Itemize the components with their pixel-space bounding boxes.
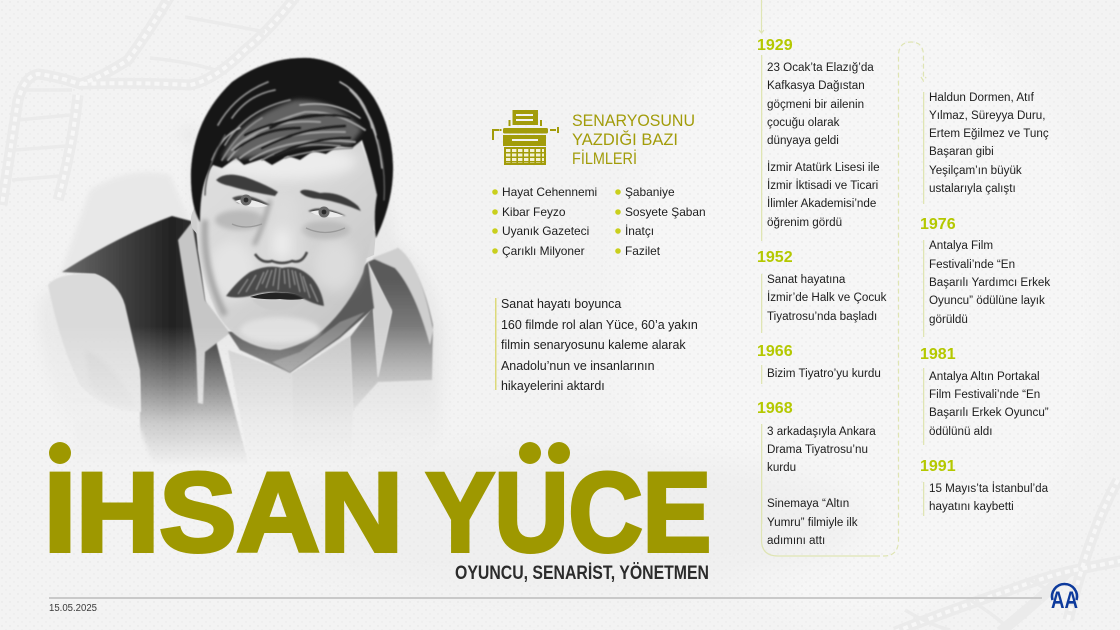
timeline 1952: İzmir’de Halk ve Çocuk (767, 291, 887, 304)
timeline 1976 (920, 216, 1050, 337)
hair (191, 58, 393, 238)
timeline 1968: 3 arkadaşıyla Ankara (767, 425, 876, 438)
timeline 1968: Drama Tiyatrosu’nu (767, 443, 868, 456)
timeline 1976: Başarılı Yardımcı Erkek (929, 276, 1050, 289)
timeline 1929 (757, 37, 880, 241)
timeline 1929: öğrenim gördü (767, 216, 842, 229)
timeline masters: Ertem Eğilmez ve Tunç (929, 127, 1049, 140)
timeline 1968: Sinemaya “Altın (767, 497, 849, 510)
film list: Sosyete Şaban (625, 205, 706, 219)
career paragraph: Anadolu’nun ve insanlarının (501, 359, 655, 373)
nose (293, 228, 304, 254)
timeline 1981: 1981 (920, 346, 956, 363)
timeline 1981: ödülünü aldı (929, 425, 992, 438)
timeline 1976: 1976 (920, 216, 956, 233)
timeline 1929: çocuğu olarak (767, 116, 840, 129)
timeline 1929: İlimler Akademisi’nde (767, 197, 876, 210)
icon: AA logo: AA (1051, 587, 1078, 614)
career paragraph (495, 297, 698, 393)
mouth (250, 292, 305, 300)
timeline 1966: Bizim Tiyatro’yu kurdu (767, 367, 881, 380)
film list: Kibar Feyzo (502, 205, 566, 219)
timeline 1968 (757, 400, 876, 547)
career paragraph: 160 filmde rol alan Yüce, 60’a yakın (501, 318, 698, 332)
ears (191, 205, 376, 260)
timeline masters: Başaran gibi (929, 145, 994, 158)
date: 15.05.2025 (49, 603, 97, 614)
film list: Şabaniye (625, 185, 675, 199)
timeline 1968: adımını attı (767, 534, 825, 547)
film list: Hayat Cehennemi (502, 185, 597, 199)
name title: YÜCE (426, 450, 711, 575)
timeline masters (923, 91, 1049, 204)
left sleeve (48, 272, 147, 456)
timeline 1991: 15 Mayıs’ta İstanbul’da (929, 482, 1049, 495)
shirt front (228, 268, 393, 421)
face (196, 140, 378, 350)
timeline 1976: Antalya Film (929, 239, 993, 252)
timeline connector (759, 0, 926, 556)
right shoulder (350, 248, 433, 410)
watercolor wash (44, 174, 440, 412)
film list: Çarıklı Milyoner (502, 244, 585, 258)
timeline 1929: 23 Ocak’ta Elazığ’da (767, 61, 874, 74)
timeline 1991: hayatını kaybetti (929, 500, 1014, 513)
timeline 1976: görüldü (929, 313, 968, 326)
vest (62, 216, 250, 470)
career paragraph: Sanat hayatı boyunca (501, 297, 621, 311)
neck (228, 262, 374, 373)
film list: Fazilet (625, 244, 661, 258)
film list (492, 185, 706, 258)
subtitle: OYUNCU, SENARİST, YÖNETMEN (455, 563, 709, 584)
timeline 1929: İzmir İktisadi ve Ticari (767, 179, 878, 192)
timeline 1929: Kafkasya Dağıstan (767, 79, 865, 92)
timeline 1981 (920, 346, 1049, 445)
timeline 1991: 1991 (920, 458, 956, 475)
timeline 1929: 1929 (757, 37, 793, 54)
timeline 1991 (920, 458, 1049, 516)
eyes (232, 196, 270, 205)
timeline 1929: göçmeni bir ailenin (767, 98, 864, 111)
heading: scripts (572, 112, 695, 168)
timeline 1929: İzmir Atatürk Lisesi ile (767, 161, 880, 174)
timeline 1952: Sanat hayatına (767, 273, 846, 286)
timeline 1968: Yumru” filmiyle ilk (767, 516, 858, 529)
icon: typewriter (492, 110, 559, 165)
timeline masters: Haldun Dormen, Atıf (929, 91, 1035, 104)
footer rule (49, 597, 1042, 599)
career paragraph: filmin senaryosunu kaleme alarak (501, 338, 686, 352)
timeline 1968: 1968 (757, 400, 793, 417)
timeline 1966 (757, 343, 881, 384)
timeline 1952 (757, 249, 887, 333)
heading: scripts: FİLMLERİ (572, 149, 637, 168)
timeline 1981: Film Festivali’nde “En (929, 388, 1040, 401)
heading: scripts: YAZDIĞI BAZI (572, 130, 678, 149)
career paragraph: hikayelerini aktardı (501, 379, 605, 393)
heading: scripts: SENARYOSUNU (572, 112, 695, 130)
timeline 1981: Antalya Altın Portakal (929, 370, 1040, 383)
name title (49, 442, 709, 554)
timeline 1976: Oyuncu” ödülüne layık (929, 294, 1045, 307)
timeline masters: ustalarıyla çalıştı (929, 182, 1016, 195)
timeline 1966: 1966 (757, 343, 793, 360)
timeline 1952: Tiyatrosu’nda başladı (767, 310, 877, 323)
timeline masters: Yılmaz, Süreyya Duru, (929, 109, 1045, 122)
timeline 1976: Festivali’nde “En (929, 258, 1015, 271)
film list: İnatçı (625, 224, 654, 238)
portrait photo (39, 58, 446, 470)
timeline 1968: kurdu (767, 461, 796, 474)
timeline 1929: dünyaya geldi (767, 134, 839, 147)
timeline masters: Yeşilçam’ın büyük (929, 164, 1022, 177)
film list: Uyanık Gazeteci (502, 224, 589, 238)
brows (216, 175, 278, 196)
collar left (178, 222, 230, 404)
timeline 1952: 1952 (757, 249, 793, 266)
timeline 1981: Başarılı Erkek Oyuncu” (929, 406, 1049, 419)
mustache (226, 267, 324, 306)
name title: İHSAN (44, 450, 403, 575)
